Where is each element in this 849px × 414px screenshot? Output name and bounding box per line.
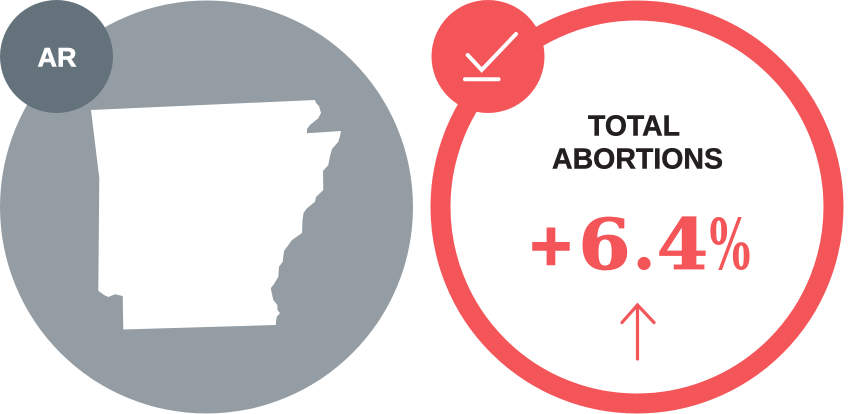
icon: check badge [432, 0, 544, 113]
arrow: up [622, 305, 654, 359]
value: percent change [528, 203, 751, 286]
value: percent change: . [632, 203, 656, 286]
value: percent change: + [528, 212, 574, 278]
value: percent change: 4 [657, 204, 708, 286]
map: Arkansas outline [91, 100, 341, 330]
badge: state abbreviation [0, 0, 113, 113]
heading: total abortions: TOTAL [588, 110, 680, 142]
value: percent change: % [709, 203, 751, 286]
red ring [440, 10, 834, 404]
panel: total abortions [432, 0, 834, 404]
value: percent change: 6 [578, 205, 631, 286]
panel: state map [0, 0, 413, 414]
heading: total abortions: ABORTIONS [552, 144, 723, 176]
badge: state abbreviation: AR [38, 42, 76, 72]
heading: total abortions [552, 110, 723, 176]
grey background circle [0, 0, 413, 414]
